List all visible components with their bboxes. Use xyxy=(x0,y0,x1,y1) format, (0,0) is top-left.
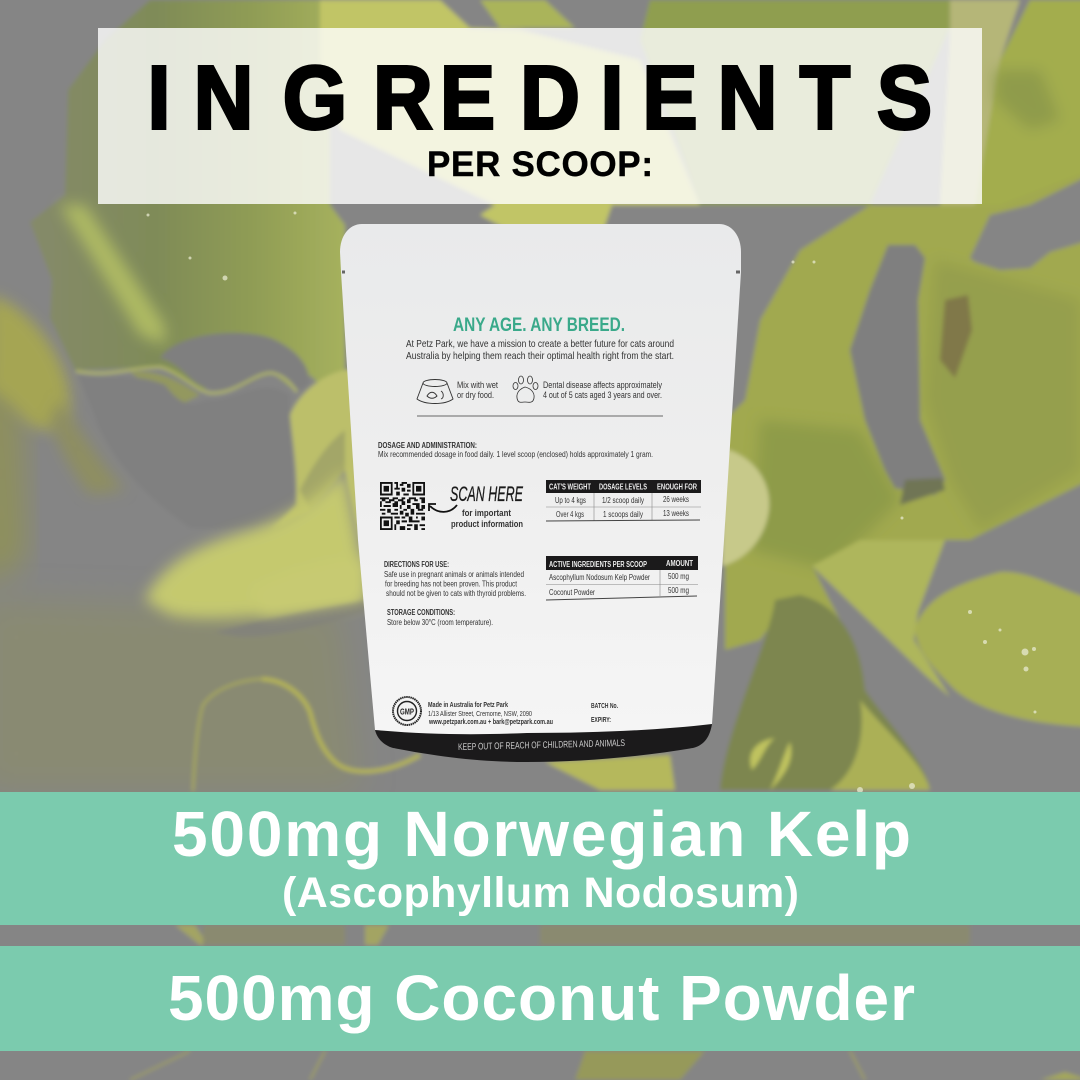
scan here lettering: SCAN HERE xyxy=(450,483,524,506)
mission text xyxy=(406,338,674,362)
leaf: yellow upper right xyxy=(270,370,360,540)
leaf: centre lower dark xyxy=(720,595,930,790)
leaf: lower left haze xyxy=(0,600,360,790)
banner: Norwegian kelp: (Ascophyllum Nodosum) xyxy=(282,869,799,917)
manufacturer details: www.petzpark.com.au + bark@petzpark.com.au xyxy=(428,719,553,726)
mix text xyxy=(457,380,498,400)
scan caption xyxy=(451,508,523,530)
dosage text: DOSAGE AND ADMINISTRATION: xyxy=(378,441,477,450)
dosage table: Over 4 kgs xyxy=(556,510,584,519)
active ingredients table: 500 mg xyxy=(668,572,689,581)
arrow to QR code xyxy=(429,504,457,512)
banner: Norwegian kelp: 500mg Norwegian Kelp xyxy=(172,798,911,870)
gray lower right xyxy=(912,480,1080,790)
pouch body xyxy=(340,224,741,762)
leaf: loop outline xyxy=(193,679,262,791)
fruit slice beside pouch xyxy=(722,448,769,566)
storage text: Store below 30°C (room temperature). xyxy=(387,618,493,627)
icon: food bowl xyxy=(417,380,453,404)
dosage text: Mix recommended dosage in food daily. 1 level scoop (enclosed) holds approximately 1 gram. xyxy=(378,450,653,459)
leaf: top left large xyxy=(30,0,345,400)
wavy leaf band xyxy=(76,367,297,393)
dosage table: Up to 4 kgs xyxy=(555,496,586,505)
directions text: for breeding has not been proven. This product xyxy=(385,580,518,588)
mission text: At Petz Park, we have a mission to create a better future for cats around xyxy=(406,338,674,350)
hole: central dark xyxy=(850,245,945,495)
warning text: KEEP OUT OF REACH OF CHILDREN AND ANIMALS xyxy=(458,738,625,753)
batch and expiry: EXPIRY: xyxy=(591,715,611,724)
batch and expiry: BATCH No. xyxy=(591,701,618,710)
dosage table xyxy=(546,480,701,521)
leaf: far left curl xyxy=(0,295,70,430)
dosage text xyxy=(378,441,653,459)
hole: top right xyxy=(970,175,1080,270)
product pouch xyxy=(340,224,741,762)
directions text: should not be given to cats with thyroid problems. xyxy=(386,589,526,598)
active ingredients table xyxy=(546,556,698,600)
leaf: blade triangle xyxy=(812,540,950,697)
dosage table: ENOUGH FOR xyxy=(657,482,697,492)
banner: coconut powder xyxy=(0,946,1080,1051)
hollow upper xyxy=(160,333,309,392)
dosage table: DOSAGE LEVELS xyxy=(599,482,647,492)
GMP badge xyxy=(393,697,421,725)
GMP badge: GMP xyxy=(400,706,414,716)
active ingredients table: Coconut Powder xyxy=(549,588,595,597)
batch and expiry xyxy=(591,701,618,724)
mission text: Australia by helping them reach their optimal health right from the start. xyxy=(406,350,674,362)
pouch black band xyxy=(375,724,712,762)
scan caption: product information xyxy=(451,519,523,530)
leaf: yellow lower xyxy=(145,470,362,618)
hollow lower xyxy=(78,375,295,529)
active ingredients table: Ascophyllum Nodosum Kelp Powder xyxy=(549,573,650,582)
directions text: DIRECTIONS FOR USE: xyxy=(384,560,449,569)
leaf: droplet leaf lower right xyxy=(915,572,1080,727)
storage text xyxy=(387,608,493,627)
active ingredients table: 500 mg xyxy=(668,586,689,595)
dental text: 4 out of 5 cats aged 3 years and over. xyxy=(543,390,662,400)
storage text: STORAGE CONDITIONS: xyxy=(387,608,455,617)
active ingredients table: AMOUNT xyxy=(666,559,693,568)
dosage table: CAT'S WEIGHT xyxy=(549,482,591,492)
fold gray under yellow leaf xyxy=(215,600,365,637)
manufacturer details: Made in Australia for Petz Park xyxy=(428,702,508,709)
leaf: light stripe xyxy=(60,205,165,345)
directions text xyxy=(384,560,526,598)
manufacturer details: 1/13 Allister Street, Cremorne, NSW, 2090 xyxy=(428,711,532,718)
manufacturer details xyxy=(428,702,553,726)
icon: paw print xyxy=(513,376,538,402)
dosage table: 13 weeks xyxy=(663,509,689,518)
QR code xyxy=(380,482,425,530)
dark scar on leaf xyxy=(940,295,972,378)
leaf: top centre cream xyxy=(320,0,700,250)
title: INGREDIENTS xyxy=(147,48,932,148)
gap gray above leaf xyxy=(725,205,870,420)
header panel xyxy=(98,28,982,204)
directions text: Safe use in pregnant animals or animals intended xyxy=(384,570,524,579)
active ingredients table: ACTIVE INGREDIENTS PER SCOOP xyxy=(549,560,647,569)
water droplets xyxy=(146,212,1036,793)
dental text: Dental disease affects approximately xyxy=(543,380,662,390)
dosage table: 26 weeks xyxy=(663,495,689,504)
subtitle: PER SCOOP: xyxy=(427,145,653,184)
leaf: left edge haze xyxy=(0,370,25,590)
pouch heading: ANY AGE. ANY BREED. xyxy=(453,315,625,336)
leaf: under pouch xyxy=(545,755,675,790)
banner: Norwegian kelp xyxy=(0,792,1080,925)
bottom fragments xyxy=(175,925,389,945)
mix text: Mix with wet xyxy=(457,380,498,390)
dosage table: 1/2 scoop daily xyxy=(602,496,644,505)
leaf: lower yellow haze xyxy=(250,558,365,615)
leaf: right main xyxy=(725,170,1080,650)
banner: coconut powder: 500mg Coconut Powder xyxy=(168,962,915,1034)
leaf: under header right xyxy=(640,0,950,205)
leaf: top right tan xyxy=(940,0,1020,205)
mix text: or dry food. xyxy=(457,390,494,400)
dosage table: 1 scoops daily xyxy=(603,510,643,519)
scan caption: for important xyxy=(462,508,512,519)
dental text xyxy=(543,380,662,400)
